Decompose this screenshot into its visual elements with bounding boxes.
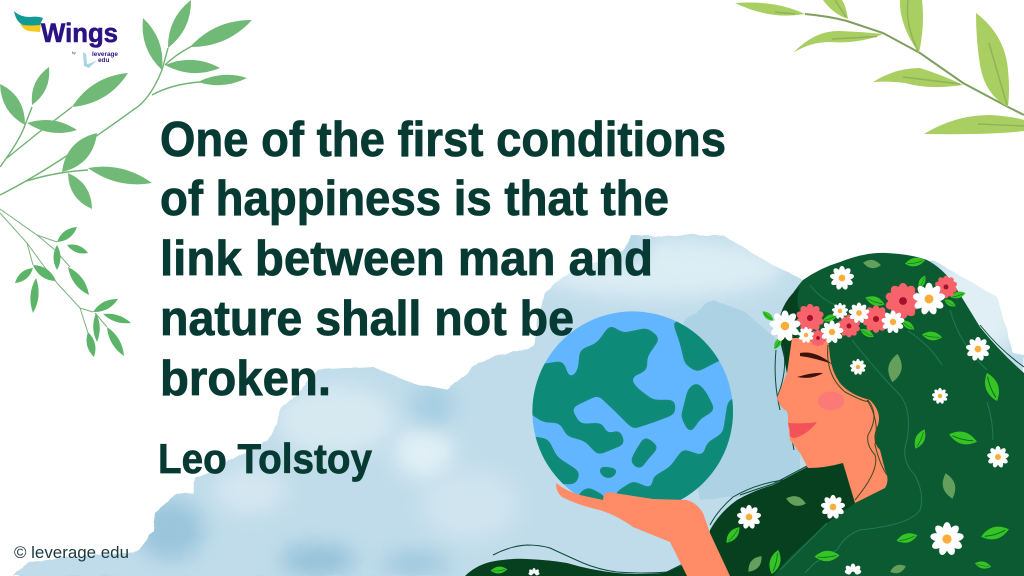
scattered daisies [528,266,1009,576]
leaf branch: top right [735,0,1024,134]
author name: Leo Tolstoy [158,435,373,482]
logo byline: by [72,51,76,55]
logo: Wings by leverage edu [14,11,118,68]
quote text [160,113,726,406]
watercolor wash [0,225,1024,576]
copyright: © leverage edu [14,544,129,562]
leaf branch: lower left [0,209,131,357]
hair: main green [773,253,1024,576]
watercolor wash base strip [18,566,1024,576]
eyebrow [800,352,832,364]
hair: shadow at forehead [778,287,800,390]
quote text: One of the first conditions [160,113,726,167]
logo wordmark: Wings [41,18,118,48]
flower wreath [761,274,966,351]
quote text: of happiness is that the [160,172,669,226]
logo byline: leverage [92,51,118,58]
quote text: link between man and [160,232,653,286]
hair strands [780,285,993,573]
arm and hand [556,483,730,576]
closed eye [797,373,823,378]
lips [788,422,817,438]
woman with flowing hair [465,253,1024,576]
logo swoosh [14,11,43,32]
quote text: broken. [160,352,331,406]
logo byline [72,51,118,68]
cheek blush [818,392,844,410]
leaf branch: top left [0,0,252,209]
thin outline strands [493,325,1024,573]
globe [532,311,733,500]
logo byline: edu [98,57,109,64]
face and neck [777,338,888,503]
quote text: nature shall not be [160,292,574,346]
face hair strands [828,345,887,500]
hair: dark underlayer [465,460,870,576]
hair leaves [490,256,1010,576]
